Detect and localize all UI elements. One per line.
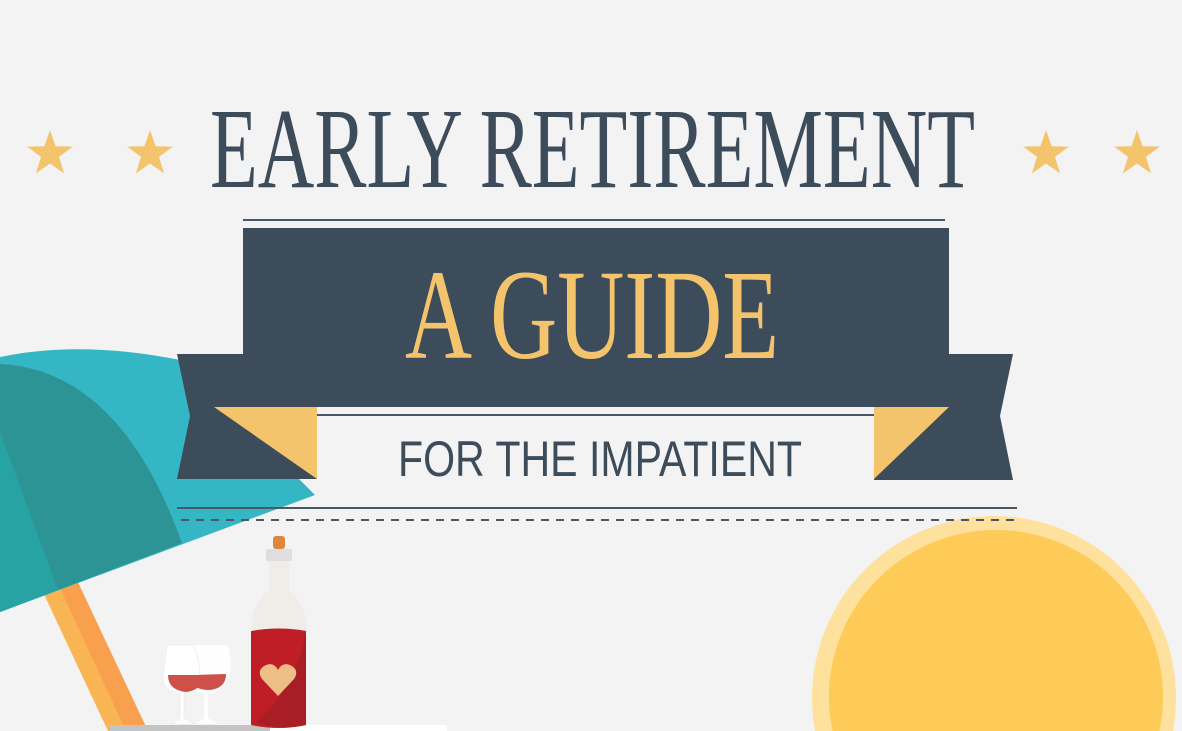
stars	[27, 130, 1160, 173]
subtitle heading: A GUIDE	[405, 244, 779, 386]
umbrella pole	[42, 578, 148, 731]
icon: wine glasses	[163, 645, 231, 724]
icon: heart	[260, 664, 296, 696]
umbrella	[0, 349, 315, 731]
sun	[812, 516, 1176, 731]
icon: wine bottle	[251, 536, 307, 728]
umbrella canopy	[0, 349, 315, 612]
tagline: FOR THE IMPATIENT	[398, 431, 802, 487]
banner ribbon	[177, 228, 1013, 480]
table top	[110, 725, 447, 731]
